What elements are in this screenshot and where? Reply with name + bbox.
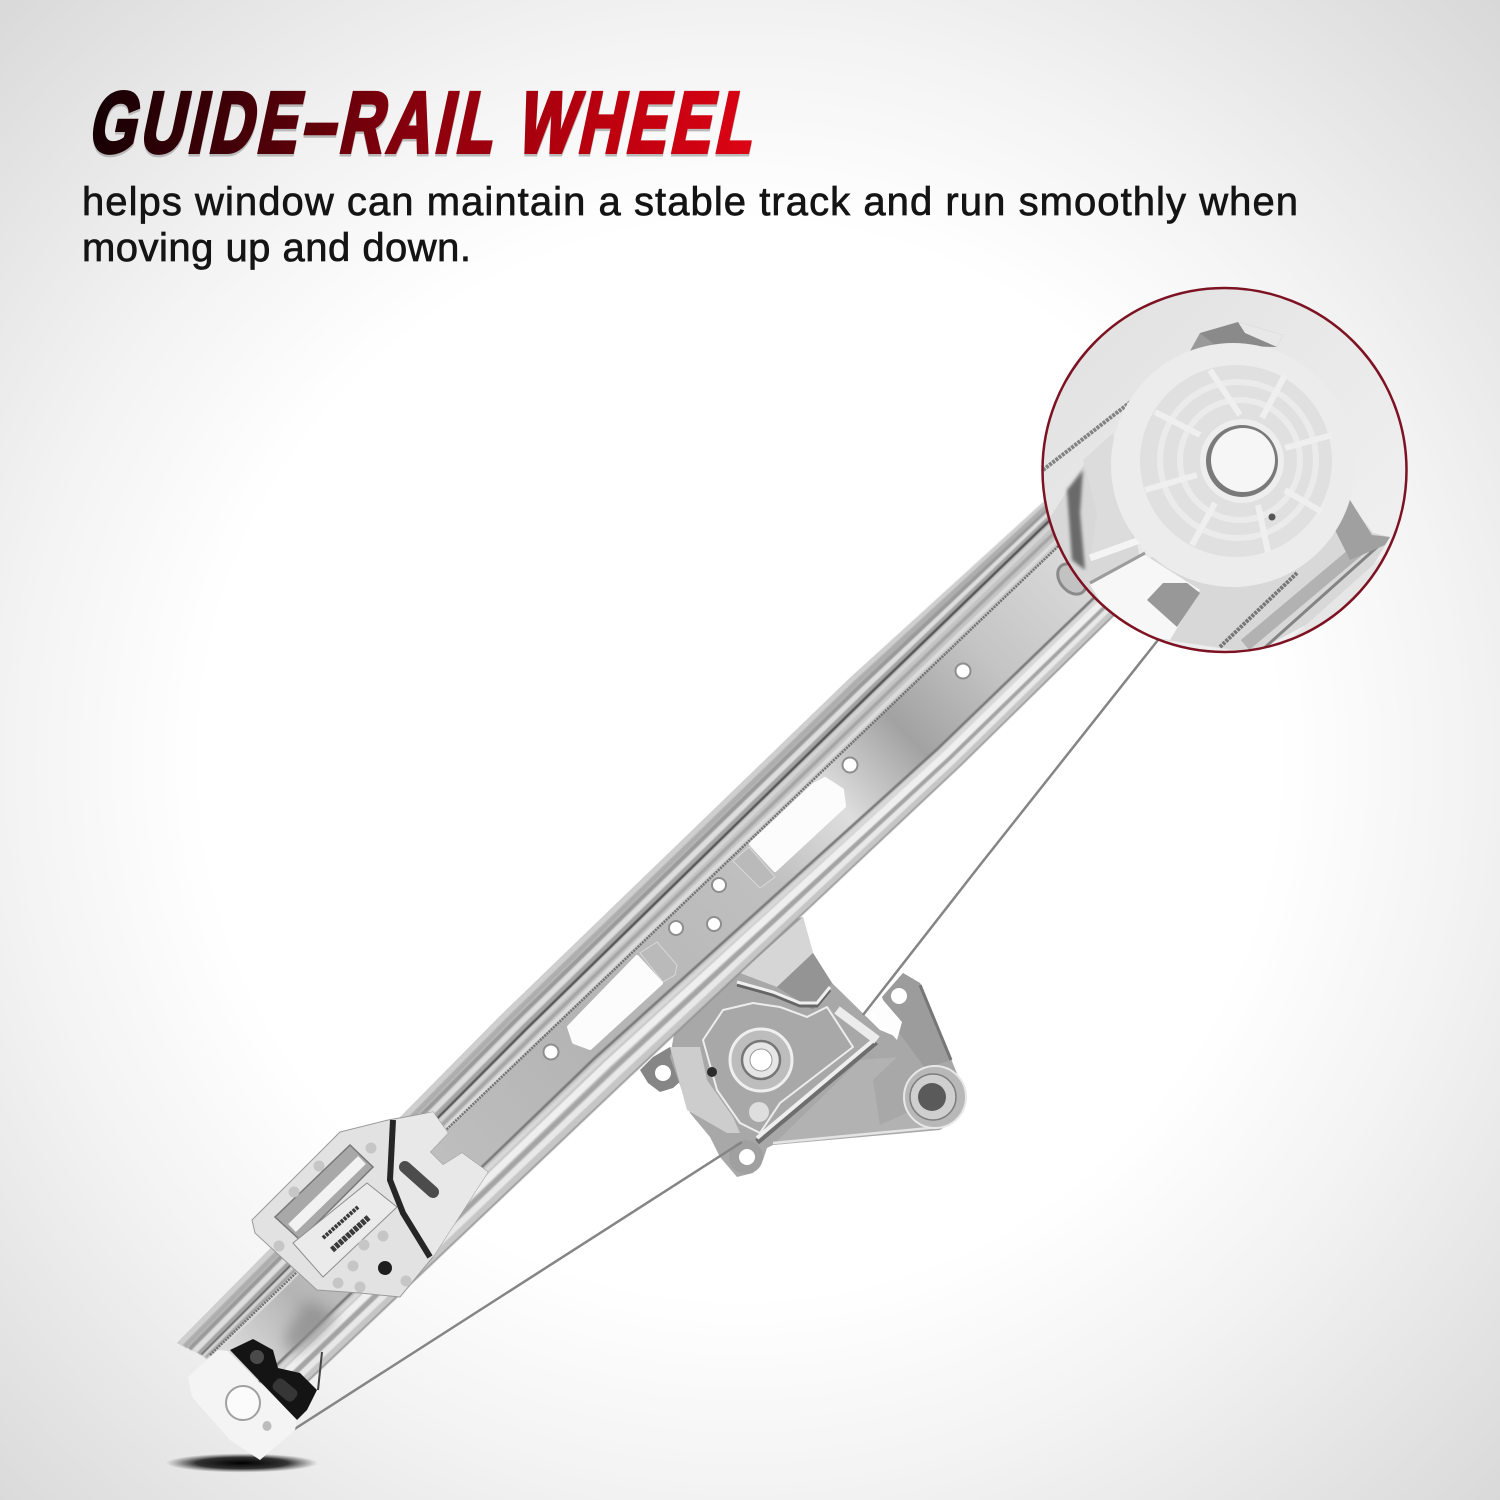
description text <box>82 180 1298 270</box>
rail slots <box>569 779 844 1048</box>
guide rail <box>177 488 1170 1398</box>
title: GUIDE–RAIL WHEEL <box>83 74 766 170</box>
upper cable <box>863 640 1158 1015</box>
motor hub <box>730 1029 792 1091</box>
window regulator product <box>177 488 1170 1460</box>
wheel <box>1111 343 1355 587</box>
magnified metal frame <box>1040 433 1395 655</box>
clip opening <box>275 1145 373 1240</box>
bracket dimples <box>274 1142 412 1292</box>
carrier bracket <box>252 1112 488 1297</box>
zoom lens: guide-rail wheel close-up <box>1040 288 1406 655</box>
bracket slot <box>405 1167 433 1192</box>
description text: helps window can maintain a stable track and run smoothly when <box>82 180 1298 224</box>
title: GUIDE–RAIL WHEEL <box>83 77 766 173</box>
hub plate <box>703 1003 853 1133</box>
far-end rivet <box>1052 558 1092 600</box>
black mount <box>230 1339 317 1420</box>
rail holes <box>544 664 970 1060</box>
description text: moving up and down. <box>82 226 471 270</box>
top metal tab <box>1200 322 1283 347</box>
mounting tabs <box>655 988 907 1174</box>
clip plate <box>293 1183 397 1277</box>
motor bracket <box>640 917 966 1177</box>
end wheel <box>188 1350 297 1460</box>
lower cable <box>293 1142 742 1430</box>
rail panel <box>210 511 1148 1383</box>
tongue plates <box>640 847 775 982</box>
bracket bend line <box>390 1120 430 1257</box>
floor shadow <box>166 1454 318 1472</box>
rail ridges <box>180 489 1170 1398</box>
inner cable <box>210 514 1092 1355</box>
pivot hub <box>904 1066 966 1128</box>
magnified cable <box>1044 400 1130 472</box>
near-end shading <box>285 1300 337 1355</box>
